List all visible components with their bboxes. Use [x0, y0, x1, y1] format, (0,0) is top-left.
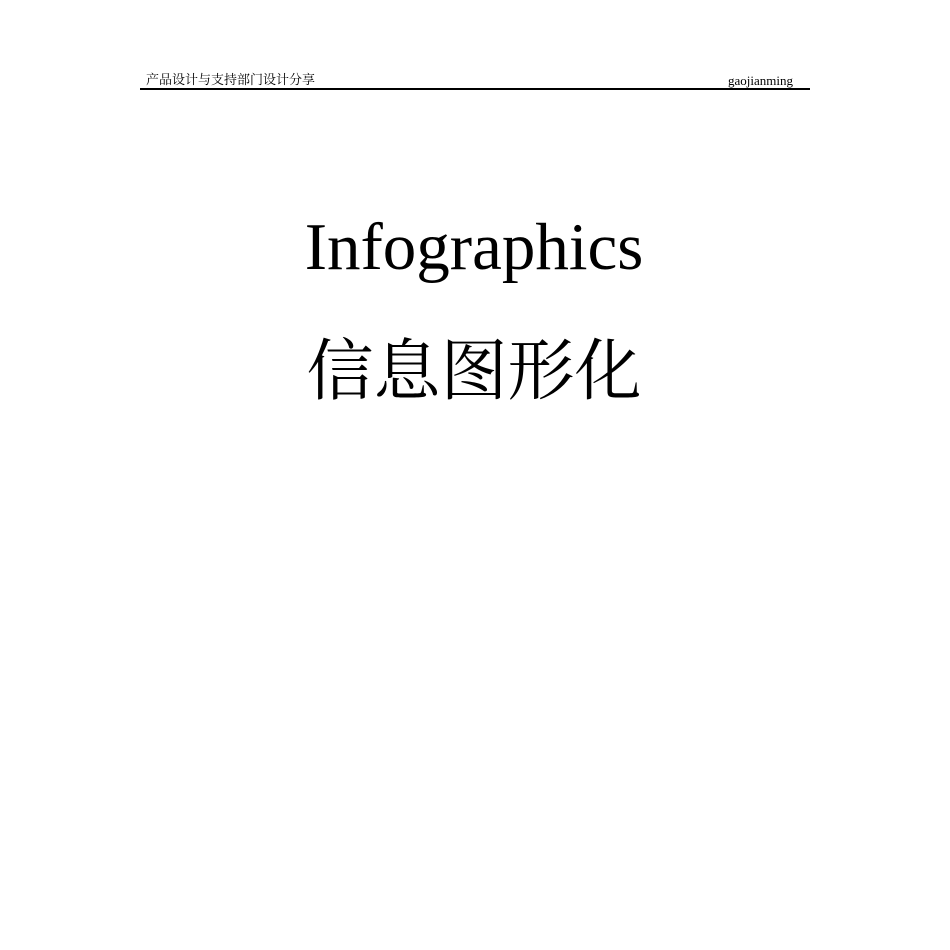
header right text: gaojianming — [728, 73, 793, 88]
header left text: 产品设计与支持部门设计分享 — [146, 72, 315, 87]
title: Infographics — [305, 210, 643, 284]
header rule — [140, 88, 810, 90]
header — [140, 72, 810, 90]
subtitle: 信息图形化 — [306, 318, 642, 414]
